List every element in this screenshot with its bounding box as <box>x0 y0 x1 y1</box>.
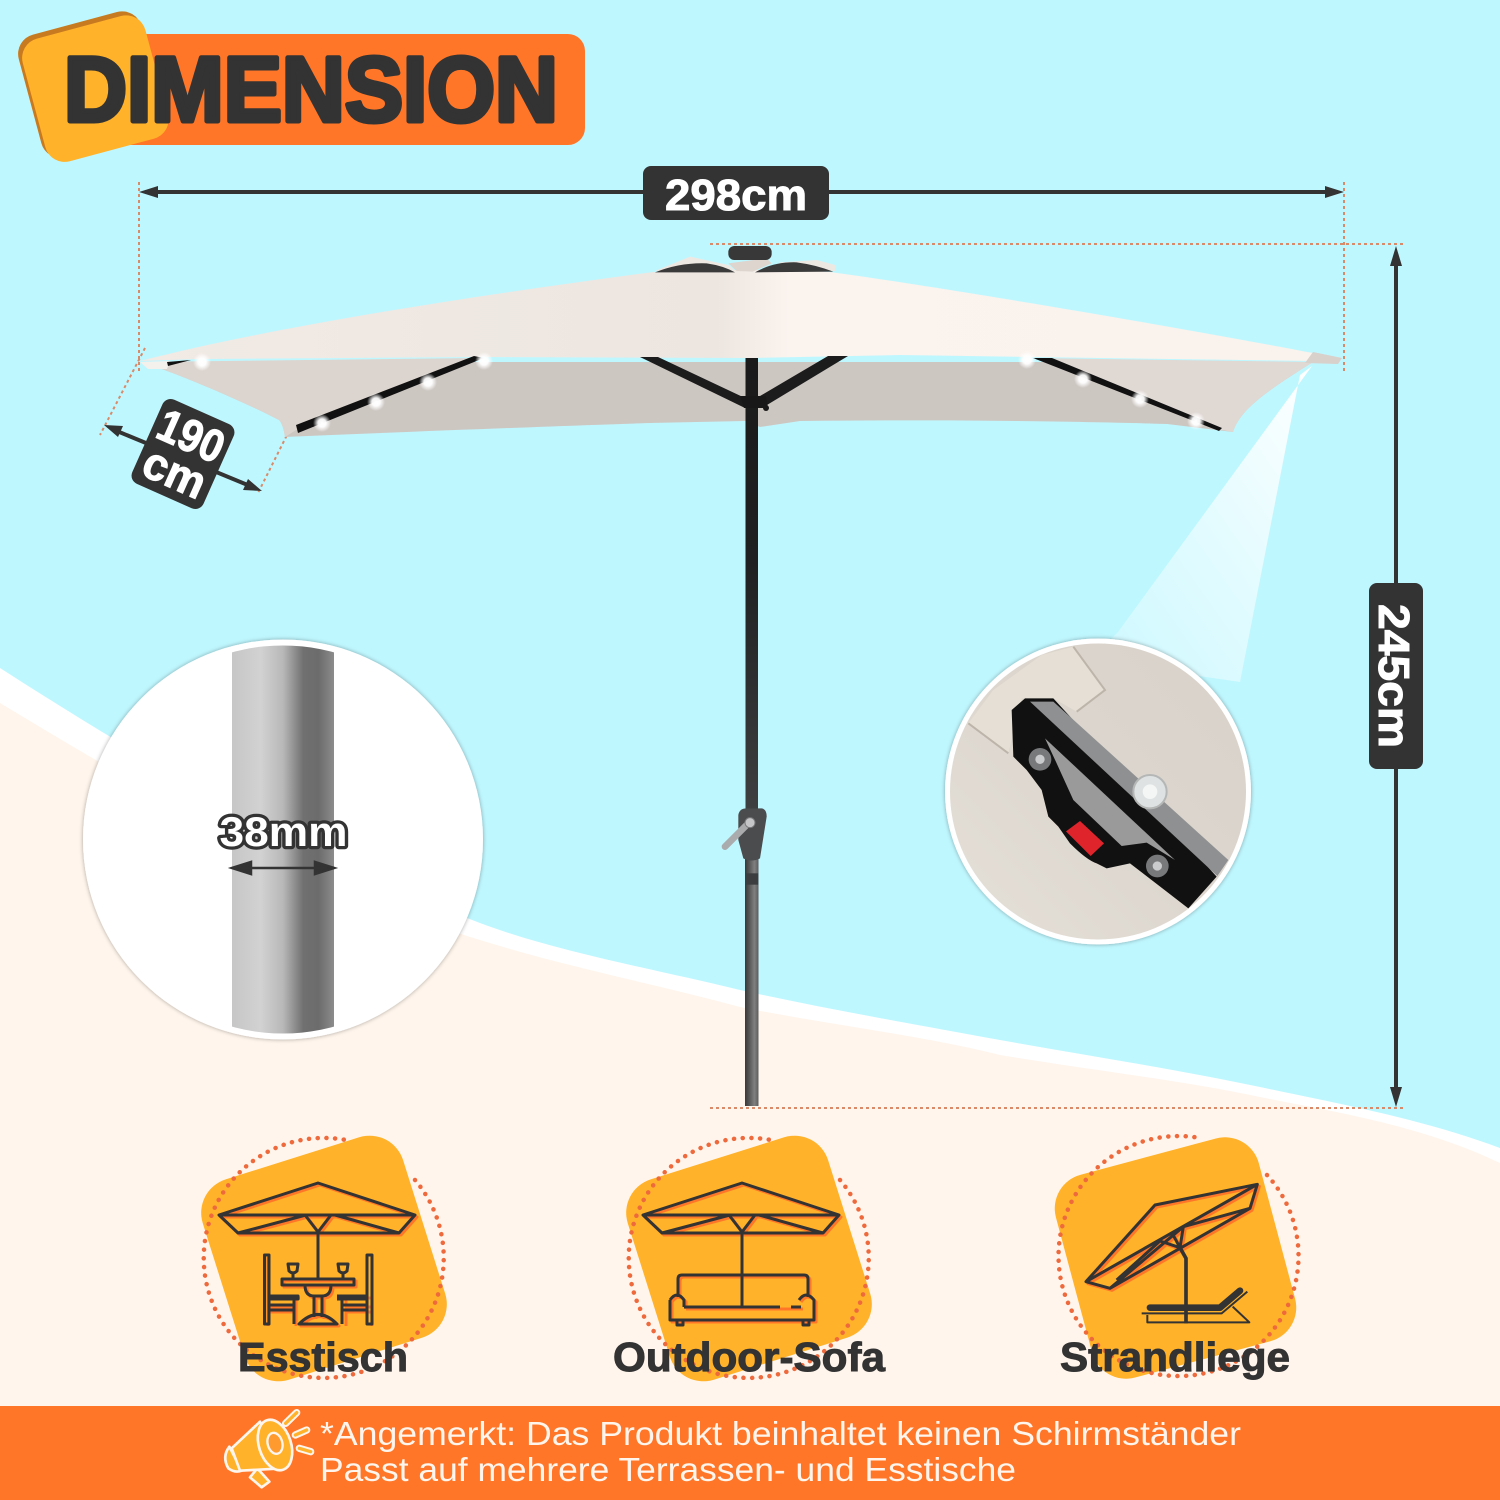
icon: megaphone <box>225 1413 311 1487</box>
note bar: Passt auf mehrere Terrassen- und Esstische <box>320 1451 1016 1488</box>
solar vent <box>655 246 835 272</box>
usage badge: Strandliege <box>1047 1129 1304 1387</box>
detail circle: pole 38mm <box>83 640 483 1040</box>
canopy top <box>140 270 1342 361</box>
dimension: depth 190cm: cm <box>135 436 215 509</box>
light beam <box>1090 366 1312 682</box>
umbrella pole <box>1180 1248 1186 1323</box>
icon: dining set shadow <box>221 1185 417 1326</box>
hub bolt <box>763 405 769 411</box>
label: Strandliege <box>1060 1334 1290 1380</box>
pole upper <box>746 358 758 810</box>
pole arrow <box>232 862 334 874</box>
fabric flap <box>981 647 1104 738</box>
struts <box>640 356 848 408</box>
switch <box>1066 821 1104 856</box>
LED lights <box>193 351 1205 432</box>
right LED rib <box>1033 358 1222 431</box>
dimension: depth 190cm <box>104 396 262 512</box>
background: white curved band <box>0 668 1500 1500</box>
canopy tip right <box>1305 352 1342 364</box>
note text: *Angemerkt: Das Produkt beinhaltet keinen Schirmständer <box>320 1415 1241 1452</box>
pole lower <box>745 855 758 1106</box>
grey stripe <box>1030 702 1228 876</box>
dotted ring <box>1059 1136 1299 1376</box>
title: DIMENSION: DIMENSION <box>64 39 558 141</box>
crank <box>725 808 767 885</box>
dimension: width 298cm <box>139 166 1344 220</box>
icon: tilted umbrella and lounger <box>1086 1184 1259 1323</box>
label: Esstisch <box>238 1334 408 1380</box>
icon: dining set <box>219 1183 415 1324</box>
lounger <box>1150 1291 1240 1308</box>
background: cream ground <box>0 703 1500 1500</box>
umbrella underside <box>140 362 1313 437</box>
screws <box>1029 748 1051 771</box>
detail circle: solar switch <box>940 635 1260 955</box>
label: Outdoor-Sofa <box>613 1334 886 1380</box>
title: DIMENSION <box>14 7 585 166</box>
usage badge: Esstisch <box>192 1127 456 1390</box>
dimension: width 298cm: 298cm <box>665 171 807 220</box>
vent flaps <box>655 257 835 272</box>
pole hub <box>740 396 768 408</box>
inner panel <box>1045 738 1175 860</box>
dimension: depth 190cm: 190 <box>149 398 233 473</box>
underside left wing <box>140 358 476 437</box>
icon: sofa shadow <box>645 1185 841 1322</box>
usage badge: Outdoor-Sofa <box>613 1127 886 1390</box>
note bar <box>0 1406 1500 1500</box>
canopy <box>1086 1184 1257 1288</box>
dimension: height 245cm <box>1369 246 1423 1107</box>
underside right wing <box>1033 358 1313 432</box>
38mm label: 38mm <box>220 808 348 855</box>
canopy shadow <box>1088 1186 1259 1290</box>
left LED rib <box>296 356 484 433</box>
dimension: height 245cm: 245cm <box>1369 604 1418 748</box>
dotted ring <box>629 1138 869 1378</box>
umbrella <box>140 246 1342 1106</box>
canopy tip left <box>140 361 170 369</box>
guide lines: dotted <box>100 182 1405 1108</box>
solar disc <box>728 246 772 260</box>
bracket <box>1012 698 1217 908</box>
dotted ring <box>204 1138 444 1378</box>
crystal knob <box>1133 775 1167 808</box>
icon: sofa <box>643 1183 839 1325</box>
